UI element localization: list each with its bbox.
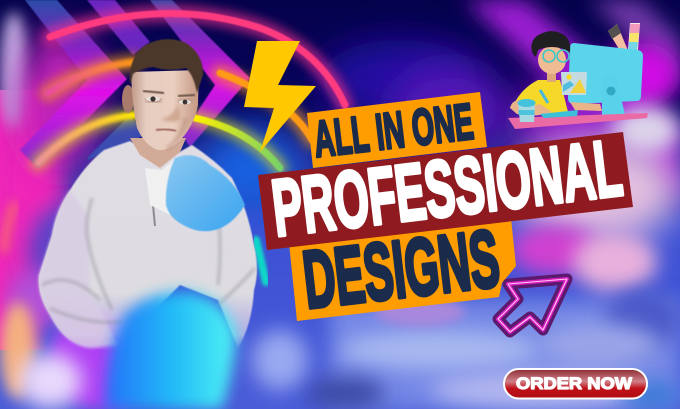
hoodie cord bbox=[153, 205, 155, 226]
banner: DESIGNS bbox=[289, 214, 516, 326]
order now button: ORDER NOW bbox=[516, 374, 633, 393]
desk bbox=[508, 113, 648, 129]
ear bbox=[122, 85, 134, 113]
eyebrows bbox=[143, 91, 195, 96]
arms bbox=[510, 100, 552, 116]
arc: left fading ends bbox=[4, 205, 14, 250]
banner: PROFESSIONAL bbox=[258, 123, 633, 253]
banner: ALL IN ONE: ALL IN ONE bbox=[311, 93, 476, 168]
hoodie bbox=[39, 141, 257, 352]
face bbox=[131, 70, 199, 150]
picture card bbox=[561, 72, 587, 95]
hoodie folds bbox=[42, 198, 255, 322]
3D designer at desk illustration bbox=[508, 23, 648, 129]
neck and collar bbox=[130, 138, 186, 168]
jaw shadow bbox=[167, 118, 186, 149]
arc: teal lower end bbox=[256, 240, 266, 282]
order now button bbox=[504, 369, 647, 398]
eye sockets bbox=[146, 99, 192, 102]
monitor stand bbox=[602, 75, 625, 117]
neck bbox=[547, 70, 556, 82]
head bbox=[538, 46, 566, 74]
tablet bbox=[540, 110, 578, 118]
hoodie left lavender tint bbox=[39, 190, 118, 348]
eyes bbox=[146, 96, 191, 104]
neon arcs bbox=[4, 13, 345, 282]
blue blob lower bbox=[105, 292, 236, 409]
hair bbox=[130, 39, 203, 93]
swatch strips bbox=[608, 23, 640, 63]
glasses bbox=[543, 50, 569, 62]
banner: DESIGNS: DESIGNS bbox=[299, 214, 504, 326]
blue blob over shoulder bbox=[166, 155, 245, 231]
arc: yellow-green bbox=[38, 115, 280, 168]
monitor bbox=[568, 43, 643, 104]
shirt bbox=[514, 80, 568, 115]
hair bbox=[531, 31, 570, 57]
arc: pink bbox=[50, 13, 345, 105]
man in hoodie bbox=[39, 39, 257, 409]
mouth bbox=[156, 129, 176, 131]
mug bbox=[518, 99, 536, 122]
banner: ALL IN ONE bbox=[307, 92, 487, 168]
icon: neon arrow cursor bbox=[498, 279, 567, 332]
pen bbox=[540, 90, 548, 103]
arc: orange bbox=[48, 62, 312, 140]
icon: lightning bolt bbox=[244, 41, 316, 152]
nose shadow bbox=[160, 104, 180, 122]
chevron bands bbox=[20, 0, 250, 168]
